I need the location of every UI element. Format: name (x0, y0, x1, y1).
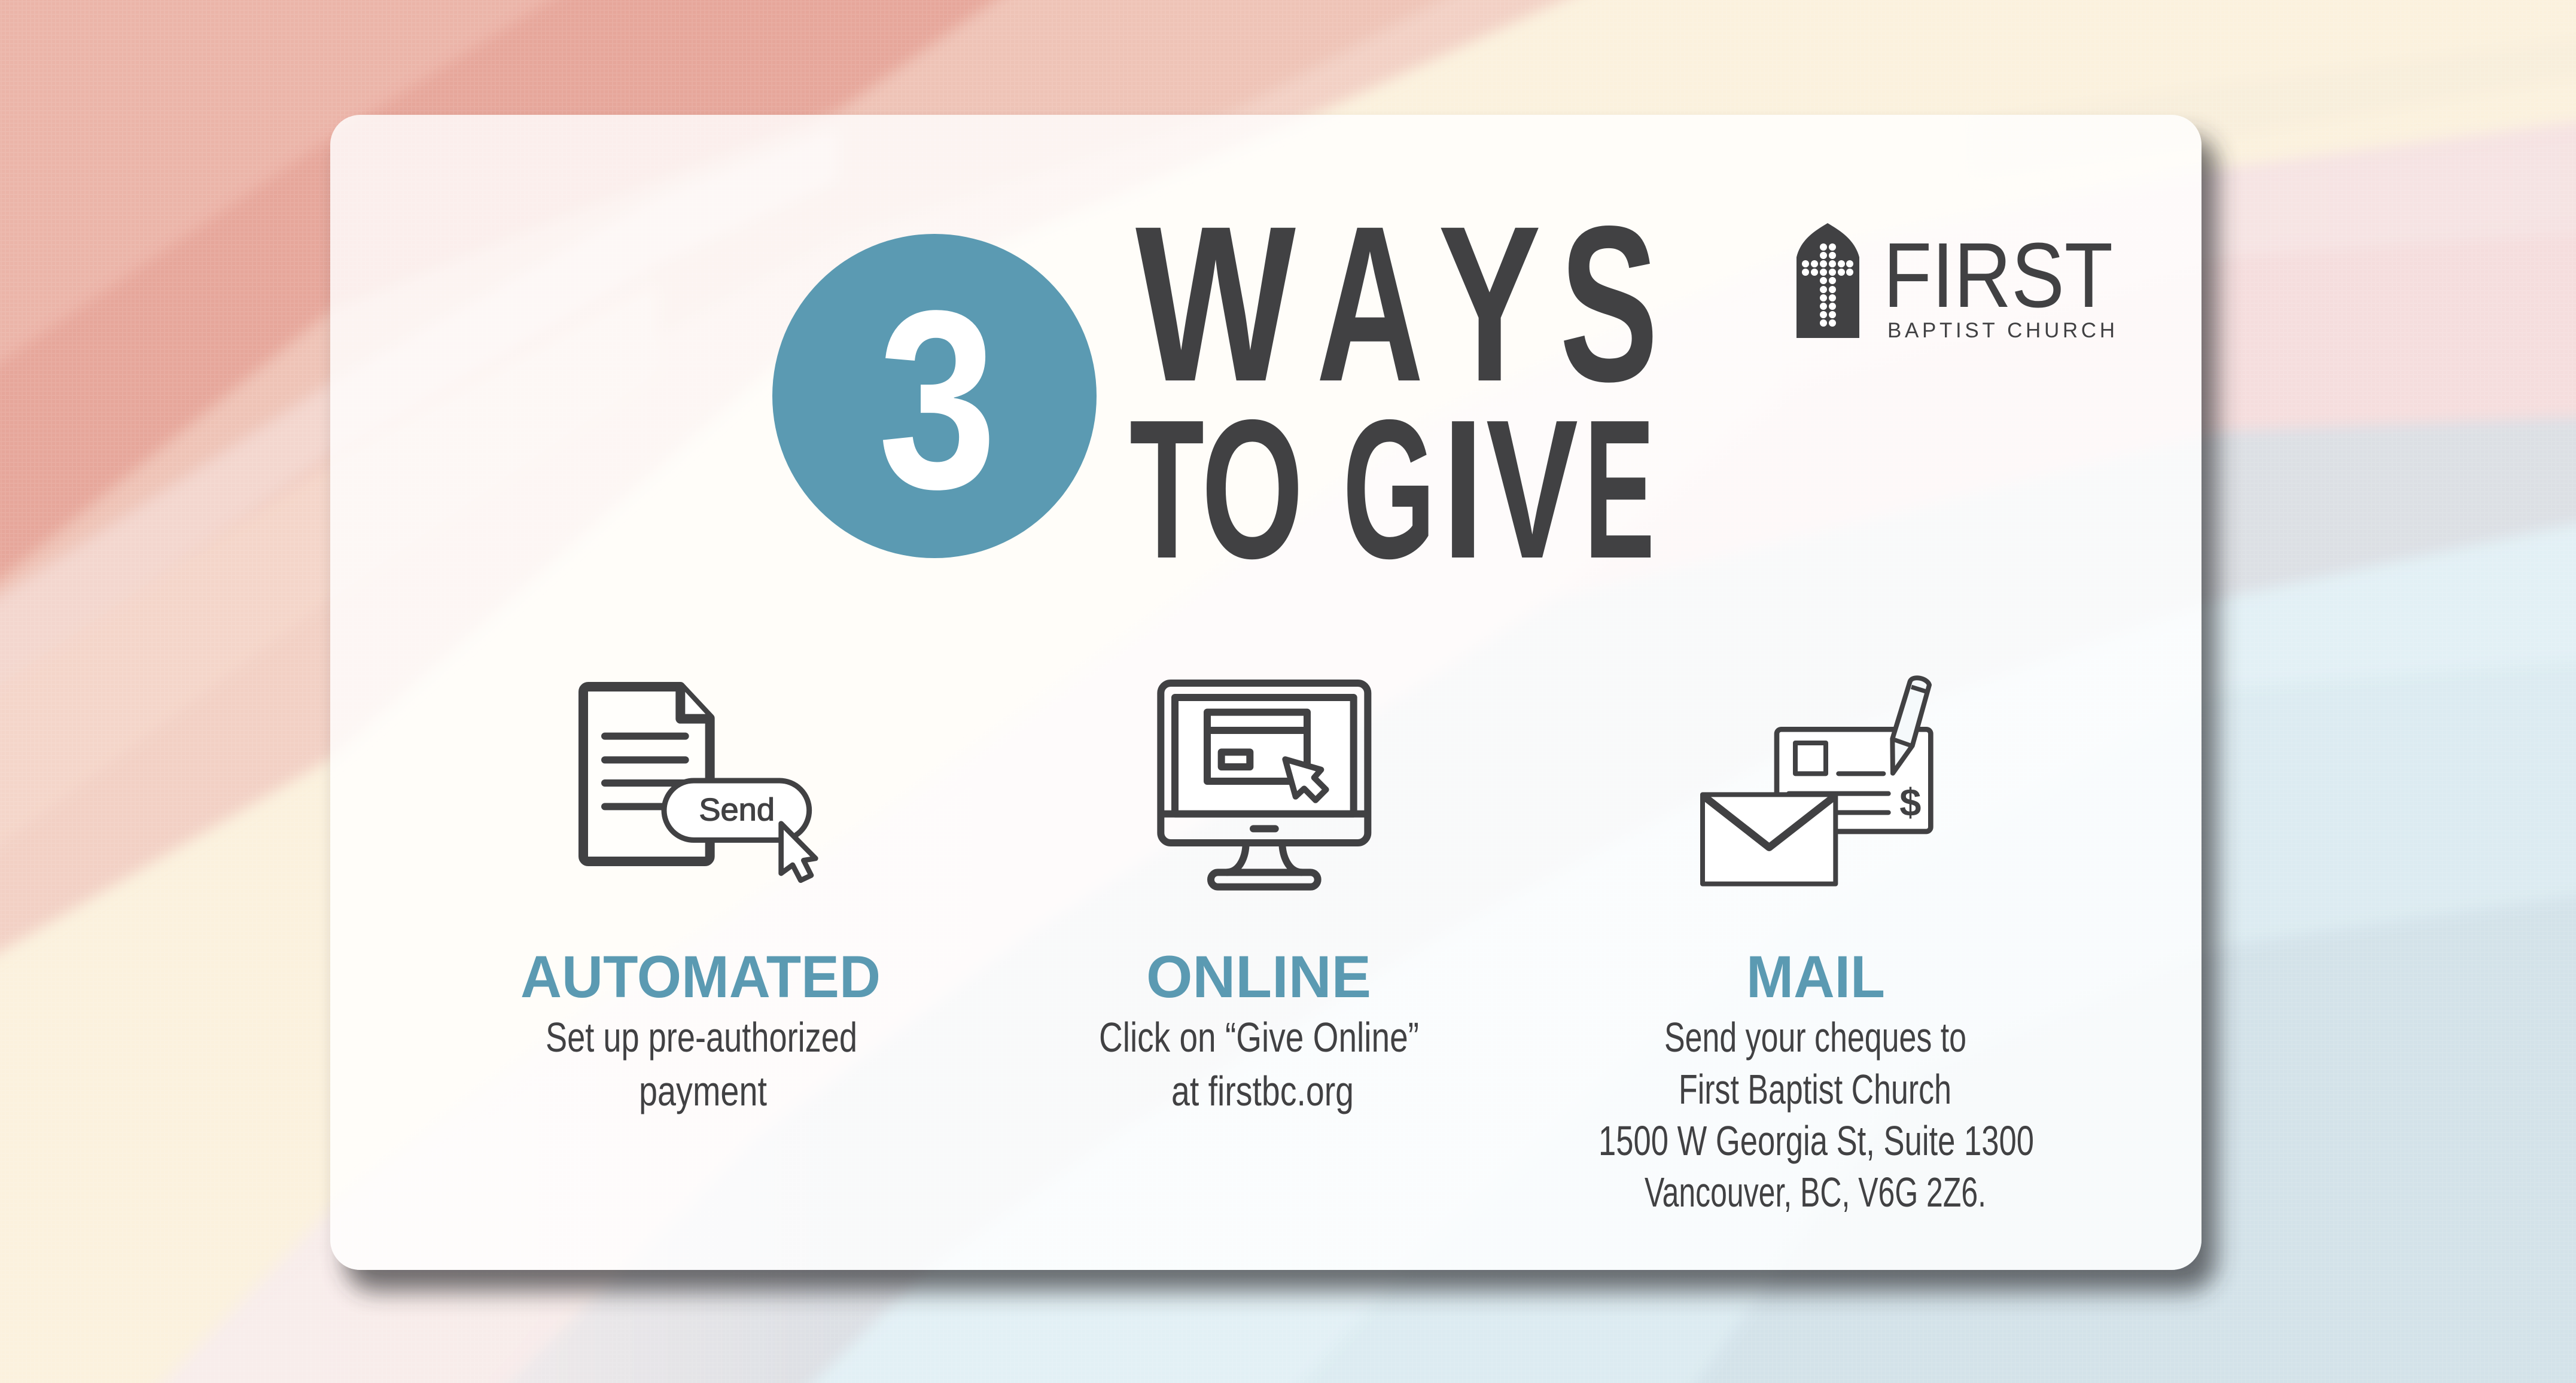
text: automated description: payment (639, 1068, 767, 1114)
badge: number 3 (772, 234, 1097, 558)
title: Y (1438, 179, 1541, 428)
text: automated description (546, 1014, 857, 1114)
heading: online: ONLINE (1146, 943, 1371, 1010)
heading: mail: MAIL (1746, 943, 1885, 1010)
icon: cheque, pencil and envelope: $ (1899, 780, 1921, 824)
text: automated description: Set up pre-authorized (546, 1014, 857, 1061)
title: W (1135, 179, 1298, 428)
icon: document with send button: Send (699, 793, 775, 828)
title: A (1316, 179, 1424, 428)
title: G (1342, 379, 1436, 600)
badge: number 3: 3 (878, 258, 997, 542)
text: online description: Click on “Give Online” (1099, 1014, 1419, 1061)
title: S (1560, 179, 1658, 428)
logo subtitle: BAPTIST CHURCH (1887, 319, 2115, 342)
text: online description (1099, 1014, 1419, 1114)
heading: automated: AUTOMATED (520, 943, 881, 1010)
title: O (1201, 379, 1304, 600)
icon: cheque, pencil and envelope (1703, 678, 1931, 884)
title: E (1584, 379, 1655, 600)
icon: desktop computer (1161, 683, 1368, 887)
text: mail address: Send your cheques to (1664, 1014, 1966, 1061)
text: mail address (1598, 1014, 2034, 1216)
title: T (1129, 379, 1204, 600)
logo wordmark: FIRST (1883, 224, 2113, 327)
text: mail address: 1500 W Georgia St, Suite 1300 (1598, 1117, 2034, 1164)
text: mail address: Vancouver, BC, V6G 2Z6. (1645, 1169, 1986, 1216)
panel: white card (330, 115, 2202, 1270)
column: automated (520, 687, 881, 1114)
column: online (1099, 683, 1419, 1114)
text: mail address: First Baptist Church (1679, 1066, 1951, 1113)
icon: document with send button (583, 687, 815, 881)
card shadow (345, 136, 2216, 1291)
logo: First Baptist Church (1796, 223, 2115, 342)
text: online description: at firstbc.org (1171, 1068, 1354, 1114)
column: mail (1598, 678, 2034, 1216)
title: I (1442, 379, 1484, 600)
title (1129, 179, 1658, 600)
icon: church window with dotted cross (1796, 223, 1859, 338)
title: V (1486, 379, 1579, 600)
